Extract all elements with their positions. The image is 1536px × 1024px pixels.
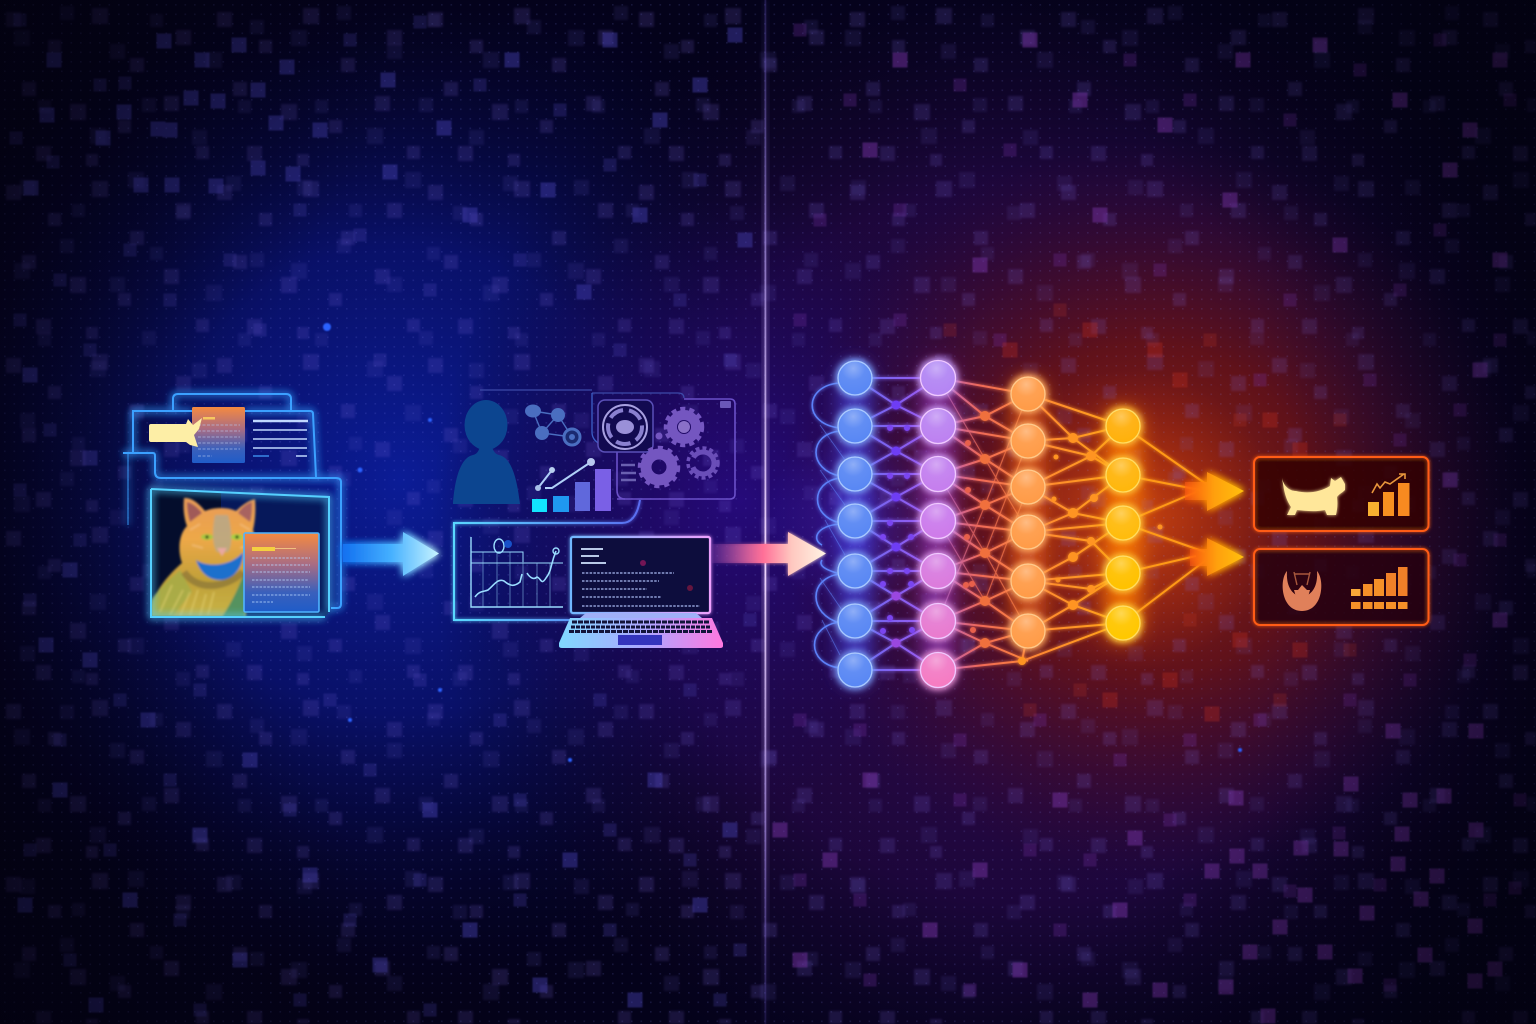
hidden layer one nodes bbox=[920, 360, 956, 688]
top data card bbox=[192, 407, 245, 463]
yellow cat-shaped tag bbox=[149, 418, 202, 447]
input loop connectors bbox=[812, 383, 845, 668]
arrow: data to analysis bbox=[343, 532, 439, 576]
output card: cat prediction bbox=[1254, 457, 1428, 531]
arrow: analysis to network bbox=[712, 532, 826, 576]
hidden layer two nodes bbox=[1011, 377, 1045, 648]
decorative squares: right side bbox=[780, 30, 1520, 1016]
cat photo frame bbox=[151, 489, 329, 617]
chart panel bbox=[454, 500, 640, 620]
decorative squares: left side bbox=[16, 20, 750, 1010]
settings panel with gears bbox=[480, 390, 735, 499]
laptop bbox=[559, 537, 723, 648]
hidden junction nodes bbox=[883, 405, 1160, 661]
stage 1: data documents and cat image bbox=[123, 394, 341, 617]
icon: growth chart bbox=[1368, 474, 1410, 516]
neural network bbox=[812, 360, 1206, 688]
output arrows bbox=[1185, 472, 1244, 576]
stage 2: analyst dashboard bbox=[453, 390, 735, 648]
decorative squares: warm centre bbox=[950, 310, 1350, 714]
icon: signal bars bbox=[1351, 567, 1408, 609]
icon: cat silhouette bbox=[1282, 477, 1345, 515]
output card: second prediction bbox=[1254, 549, 1428, 625]
decorative sparkle dots bbox=[323, 323, 1242, 762]
node highlights bbox=[838, 361, 1140, 687]
output connections bbox=[1123, 426, 1206, 623]
document text lines bbox=[253, 421, 308, 456]
network icon bbox=[526, 405, 580, 445]
icon: animal emblem bbox=[1283, 571, 1321, 611]
front data card bbox=[244, 533, 319, 612]
cat photo bbox=[151, 489, 329, 617]
network glow halo bbox=[855, 378, 1123, 670]
back folder outlines bbox=[123, 394, 341, 608]
output layer nodes bbox=[1106, 409, 1140, 640]
person silhouette bbox=[453, 400, 520, 504]
input layer nodes bbox=[838, 361, 872, 687]
network connections bbox=[855, 378, 1123, 670]
divider line bbox=[762, 0, 769, 1024]
rising bars with trend line bbox=[532, 458, 611, 512]
